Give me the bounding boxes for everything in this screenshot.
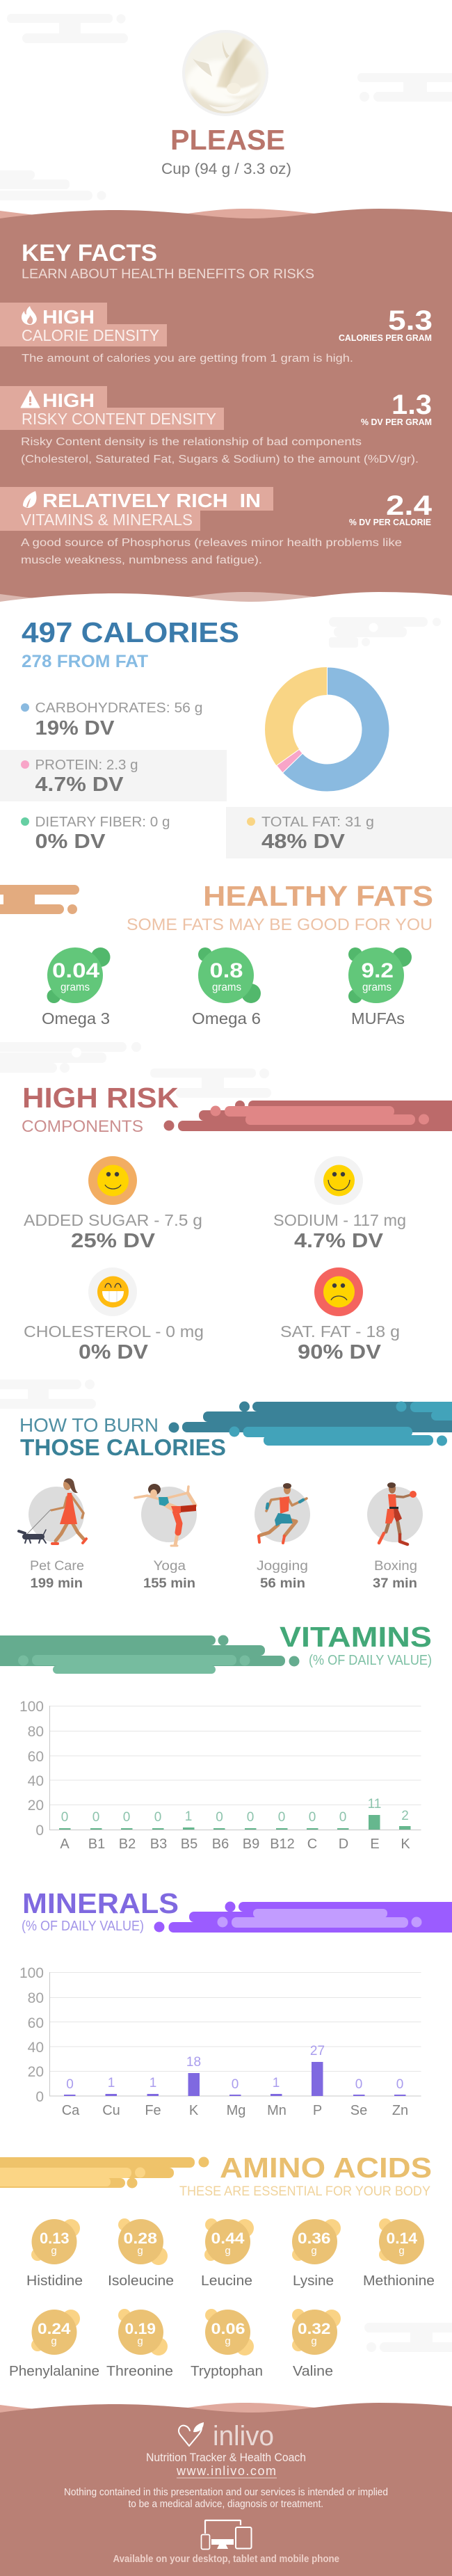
item: added sugar: 25% DV [71,1230,156,1252]
bar chart: vitamins: 60 [28,1749,44,1765]
panel: calories [0,616,452,858]
icon: heart with leaf [179,2422,204,2446]
bar chart: vitamins: 11 [368,1797,381,1811]
item: sodium: 4.7% DV [294,1230,384,1252]
bar chart: vitamins: 0 [92,1810,99,1825]
bubble: phenylalanine [9,2310,99,2379]
panel: minerals [19,1887,452,2118]
item: saturated fat: 90% DV [298,1341,382,1363]
bar chart: minerals: 0 [232,2077,239,2092]
decoration: teal cloud [168,1401,452,1446]
decoration: red cloud [164,1101,452,1131]
subheading: (% OF DAILY VALUE) [22,1919,144,1934]
description [21,537,402,566]
bar chart: vitamins: A [60,1837,70,1852]
panel: amino acids [0,2152,435,2379]
bar chart: vitamins: B9 [243,1837,259,1852]
bubble: leucine: Leucine [201,2273,252,2289]
bar chart: vitamins: B2 [119,1837,136,1852]
legend: protein: 4.7% DV [35,774,124,796]
bar chart: vitamins: 2 [401,1809,409,1823]
bubble: lysine: Lysine [293,2273,334,2289]
subheading: COMPONENTS [22,1117,143,1136]
bar chart: vitamins: D [339,1837,348,1852]
bubble: methionine [363,2218,435,2289]
bar chart: minerals: 80 [28,1990,44,2006]
bubble: MUFAs: grams [362,982,392,993]
donut chart: macronutrients [277,667,389,792]
bubble: threonine: g [137,2335,143,2347]
bubble: valine: 0.32 [298,2320,331,2337]
legend: dietary fiber [21,815,170,853]
description: The amount of calories you are getting from 1 gram is high. [22,353,353,365]
bubble: lysine: 0.36 [298,2230,331,2247]
bar chart: vitamins: E [370,1837,380,1852]
bubble: phenylalanine: 0.24 [38,2320,71,2337]
bubble: phenylalanine: Phenylalanine [9,2363,99,2379]
item: added sugar [24,1156,202,1252]
legend: total fat: 48% DV [261,831,346,853]
activity: boxing: 37 min [373,1576,417,1591]
bubble: omega 3: Omega 3 [42,1009,110,1027]
website link: www.inlivo.com [176,2464,276,2478]
bar chart: vitamins: B3 [150,1837,167,1852]
bubble: histidine: Histidine [26,2273,83,2289]
panel: vitamins [0,1621,432,1852]
activity: boxing [367,1482,423,1591]
rating: HIGH [42,306,95,328]
availability note: Available on your desktop, tablet and mobile phone [113,2553,339,2565]
activity: pet care [19,1478,86,1591]
bar chart: vitamins [19,1699,421,1852]
bar chart: minerals: Ca [62,2103,80,2118]
bubble: threonine: Threonine [106,2363,173,2379]
activity: jogging: 56 min [260,1576,305,1591]
bar chart: minerals: 18 [186,2055,201,2070]
bubble: omega 6: 0.8 [210,959,243,982]
item: cholesterol: 0% DV [79,1341,149,1363]
panel: high risk components [22,1082,452,1363]
bar chart: vitamins: 0 [123,1810,130,1825]
bubble: MUFAs [348,947,412,1027]
bar chart: vitamins: 80 [28,1724,44,1740]
item: sodium [273,1156,406,1252]
unit: % DV PER GRAM [361,417,432,427]
bubble: tryptophan: Tryptophan [191,2363,263,2379]
icon: flame [22,306,37,325]
bar chart: minerals: Cu [102,2103,120,2118]
disclaimer [64,2486,388,2510]
bar chart: vitamins: 0 [247,1810,254,1825]
bubble: methionine: g [398,2245,405,2257]
legend: carbohydrates [21,701,203,739]
bar chart: minerals: 40 [28,2040,44,2056]
bar chart: minerals: 60 [28,2015,44,2031]
title: PLEASE [170,124,285,156]
heading line 1: HOW TO BURN [19,1414,159,1436]
image: milk splash photo [182,30,268,122]
bubble: isoleucine: 0.28 [124,2230,157,2247]
legend: protein [0,750,227,801]
legend: carbohydrates: CARBOHYDRATES: 56 g [35,701,203,716]
bar chart: vitamins: 1 [185,1809,192,1824]
subheading: calories from fat: 278 FROM FAT [22,652,148,671]
bar chart: vitamins: 40 [28,1773,44,1789]
subheading: LEARN ABOUT HEALTH BENEFITS OR RISKS [22,266,314,282]
panel: key facts [0,209,452,616]
bubble: MUFAs: 9.2 [362,959,394,982]
bar chart: vitamins: C [307,1837,317,1852]
activity: jogging: Jogging [257,1559,308,1574]
legend: total fat: TOTAL FAT: 31 g [261,815,374,830]
description: Risky Content density is the relationship of bad components [21,436,362,448]
bar chart: minerals: P [313,2103,322,2118]
heading: AMINO ACIDS [220,2152,432,2184]
bar chart: vitamins: 0 [154,1810,161,1825]
bar chart: minerals: 1 [108,2076,115,2090]
subheading: SOME FATS MAY BE GOOD FOR YOU [127,915,433,934]
bubble: leucine [201,2218,254,2289]
activity: pet care: Pet Care [30,1559,84,1574]
bubble: omega 6: grams [212,982,241,993]
description: (Cholesterol, Saturated Fat, Sugars & Sodium) to the amount (%DV/gr). [21,454,419,465]
rating: HIGH [42,390,95,411]
unit: CALORIES PER GRAM [339,333,432,343]
bar chart: vitamins: B1 [88,1837,105,1852]
bubble: isoleucine: g [137,2245,143,2257]
decoration: green cloud [0,1635,299,1674]
wordmark: inlivo [213,2421,274,2451]
bar chart: vitamins: 100 [19,1699,44,1715]
item: cholesterol [24,1267,204,1363]
bar chart: vitamins: 0 [61,1810,68,1825]
bubble: histidine: g [51,2245,57,2257]
item: saturated fat [280,1267,400,1363]
bubble: omega 6: Omega 6 [192,1009,261,1027]
heading: VITAMINS [280,1621,432,1653]
bar chart: minerals [19,1965,421,2118]
bubble: lysine [292,2219,341,2289]
fact: risky content density [0,386,432,465]
panel: healthy fats [0,880,433,1027]
bar chart: vitamins: 0 [309,1810,316,1825]
bar chart: minerals: K [189,2103,199,2118]
value: 2.4 [386,490,433,521]
icon: warning [21,390,40,408]
heading: MINERALS [22,1887,179,1919]
activity: yoga: 155 min [143,1576,195,1591]
subheading: THESE ARE ESSENTIAL FOR YOUR BODY [179,2184,430,2199]
bar chart: minerals: 0 [396,2077,403,2092]
bubble: histidine [26,2219,83,2289]
unit: % DV PER CALORIE [349,518,431,527]
fact: calorie density [0,303,433,365]
bubble: phenylalanine: g [51,2335,57,2347]
decoration: orange cloud [0,885,79,914]
bar chart: minerals: 0 [35,2089,44,2105]
bar chart: minerals: 100 [19,1965,44,1981]
bubble: isoleucine [108,2218,174,2289]
icon: leaf [23,491,36,508]
bar chart: minerals: 27 [310,2044,325,2058]
legend: dietary fiber: DIETARY FIBER: 0 g [35,815,170,830]
bar chart: minerals: 1 [273,2076,280,2090]
serving size: Cup (94 g / 3.3 oz) [161,160,291,177]
bar chart: vitamins: K [401,1837,410,1852]
description: A good source of Phosphorus (releaves minor health problems like [21,537,402,549]
item: saturated fat: SAT. FAT - 18 g [280,1322,400,1341]
item: sodium: SODIUM - 117 mg [273,1211,406,1229]
tagline: Nutrition Tracker & Health Coach [146,2451,306,2464]
bar chart: minerals: Fe [145,2103,161,2118]
bar chart: minerals: 1 [150,2076,156,2090]
bubble: threonine [106,2309,173,2379]
fact name: CALORIE DENSITY [22,326,159,344]
bubble: leucine: 0.44 [211,2230,245,2247]
bubble: valine: Valine [293,2363,333,2379]
bar chart: vitamins: B12 [270,1837,295,1852]
activity: boxing: Boxing [374,1559,417,1574]
decoration: purple cloud [154,1902,452,1933]
bubble: omega 3: grams [60,982,90,993]
panel: footer [0,2403,452,2576]
fact name: VITAMINS & MINERALS [21,511,193,529]
icon: devices [202,2520,252,2549]
bar chart: vitamins: B5 [181,1837,197,1852]
decoration: yellow cloud [0,2157,209,2189]
legend: total fat [226,807,452,858]
bar chart: vitamins: 0 [216,1810,223,1825]
bar chart: vitamins: 0 [278,1810,285,1825]
bubble: methionine: 0.14 [387,2230,418,2247]
bubble: omega 3: 0.04 [52,959,99,982]
value: 5.3 [388,305,433,336]
bubble: valine: g [311,2335,317,2347]
bar chart: vitamins: 0 [35,1823,44,1839]
bar chart: minerals: Se [350,2103,367,2118]
heading: HIGH RISK [22,1082,179,1114]
activity: jogging [255,1483,310,1591]
header: food photo and title [161,30,291,177]
disclaimer: to be a medical advice, diagnosis or treatment. [128,2498,323,2510]
bar chart: minerals: 0 [355,2077,362,2092]
bar chart: minerals: 20 [28,2064,44,2080]
value: 1.3 [392,390,432,420]
legend: dietary fiber: 0% DV [35,831,106,853]
activity: yoga [135,1484,197,1591]
subheading: (% OF DAILY VALUE) [309,1653,432,1668]
description: muscle weakness, numbness and fatigue). [21,554,262,566]
item: cholesterol: CHOLESTEROL - 0 mg [24,1322,204,1341]
bubble: histidine: 0.13 [40,2230,70,2247]
bubble: methionine: Methionine [363,2273,435,2289]
heading line 2: THOSE CALORIES [20,1434,226,1460]
bar chart: minerals: 0 [66,2077,74,2092]
activity: pet care: 199 min [31,1576,83,1591]
bubble: lysine: g [311,2245,317,2257]
bubble: tryptophan: 0.06 [211,2320,245,2337]
bar chart: minerals: Zn [392,2103,408,2118]
bar chart: vitamins: B6 [212,1837,229,1852]
disclaimer: Nothing contained in this presentation and our services is intended or implied [64,2486,388,2498]
bubble: omega 6 [192,947,261,1027]
fact: vitamins and minerals [0,487,433,566]
bar chart: vitamins: 20 [28,1798,44,1814]
bubble: threonine: 0.19 [125,2320,156,2337]
legend: protein: PROTEIN: 2.3 g [35,758,138,773]
bar chart: vitamins: 0 [339,1810,346,1825]
item: added sugar: ADDED SUGAR - 7.5 g [24,1211,202,1229]
bubble: tryptophan [191,2309,263,2379]
bubble: valine [292,2309,341,2379]
bubble: omega 3 [42,947,110,1027]
bubble: MUFAs: MUFAs [351,1009,405,1027]
bubble: leucine: g [225,2245,231,2257]
fact name: RISKY CONTENT DENSITY [22,410,216,428]
bubble: tryptophan: g [225,2335,231,2347]
heading: key facts: KEY FACTS [22,240,157,266]
heading: HEALTHY FATS [203,880,433,912]
rating: RELATIVELY RICH IN [42,490,261,511]
bubble: isoleucine: Isoleucine [108,2273,174,2289]
legend: carbohydrates: 19% DV [35,717,115,739]
heading: calories: 497 CALORIES [22,616,239,648]
bar chart: minerals: Mg [227,2103,245,2118]
bar chart: minerals: Mn [267,2103,286,2118]
panel: how to burn those calories [19,1401,452,1591]
activity: yoga: Yoga [153,1559,186,1574]
description [21,436,419,465]
logo: inlivo [179,2421,274,2451]
